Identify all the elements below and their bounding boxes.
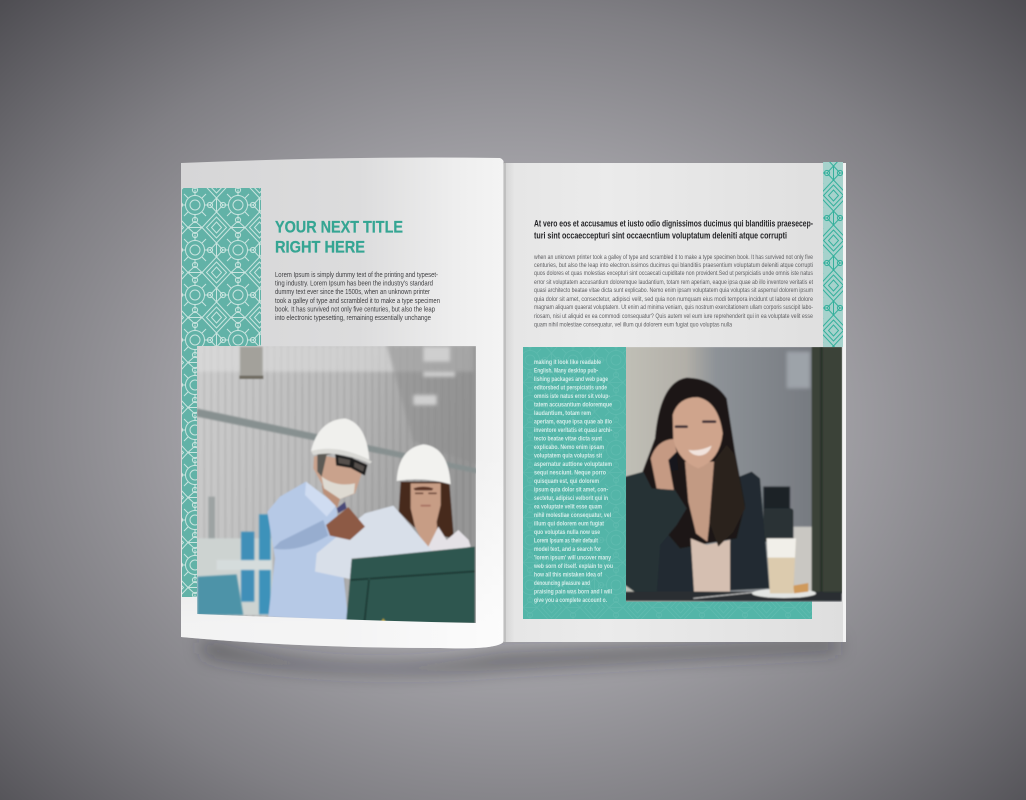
left title: YOUR NEXT TITLE [275,217,403,236]
right body text: centuries, but also the leap into electron.issimos ducimus qui blanditiis praesentium voluptatum deleniti atque corrupti [534,263,813,269]
coffee glass [767,538,796,593]
jacket [656,471,770,593]
neck and chest [685,462,717,542]
left body text: into electronic typesetting, remaining essentially unchange [275,313,431,322]
panel: right page [504,162,846,642]
teal column text: English. Many desktop pub- [534,368,598,374]
blueprint paper [315,506,433,579]
teal column text: nihil molestiae consequatur, vel [534,512,611,519]
top [691,538,730,592]
teal column text [533,359,613,604]
teal column text: lishing packages and web page [534,376,608,383]
right body text: quam nihil molestiae consequatur, vel illum qui dolorem eum fugiat quo voluptas nulla [534,322,733,328]
teal column text: tecto beatae vitae dicta sunt [534,436,603,442]
left pattern block [182,188,261,597]
left body text [275,270,440,322]
chair [763,508,793,542]
left title: RIGHT HERE [275,237,365,256]
right body text: quia dolor sit amet, consectetur, adipisci velit, sed quia non numquam eius modi tempora incidunt ut labore et dolore [534,297,814,303]
right body text: error sit voluptatem accusantium doloremque laudantium, totam rem aperiam, eaque ipsa quae ab illo inventore veritatis et [534,280,813,286]
man engineer [267,418,372,622]
teal column text: denouncing pleasure and [534,580,590,587]
panel: left page [181,158,504,648]
right heading [534,218,813,241]
phone and hand [670,460,671,461]
sleeve [625,472,687,593]
teal column text: Lorem Ipsum as their default [534,538,599,544]
left body text: Lorem Ipsum is simply dummy text of the printing and typeset- [275,270,438,279]
plate [752,589,816,598]
right body text: riosam, nisi ut aliquid ex ea commodi consequatur? Quis autem vel eum iure reprehenderit qui in ea voluptate velit esse [534,314,814,320]
teal column text: voluptatem quia voluptas sit [534,452,603,460]
gutter shadow [503,162,506,642]
teal column text: model text, and a search for [534,546,601,553]
shadow under brochure [200,640,838,673]
teal column text: 'lorem ipsum' will uncover many [534,554,611,562]
right body text: quos dolores et quas molestias excepturi sint occaecati cupiditate non provident.Sed ut perspiciatis unde omnis iste natus [534,271,813,277]
teal column text: tatem accusantium doloremque [534,402,612,408]
left body text: took a galley of type and scrambled it to make a type specimen [275,296,440,305]
teal column text: web sorn of itself. explain to you [533,563,613,570]
right heading: At vero eos et accusamus et iusto odio dignissimos ducimus qui blanditiis praesecep- [534,218,813,229]
right pattern strip [823,162,843,347]
teal column text: inventore veritatis et quasi archi- [534,427,612,434]
right body text: quasi architecto beatae vitae dicta sunt explicabo. Nemo enim ipsam voluptatem quia voluptas sit aspernul dolorem ipsum [534,288,813,294]
teal column text: ea voluptate velit esse quam [534,504,602,510]
teal column text: making it look like readable [534,359,601,366]
photo: businesswoman on phone [625,347,842,602]
teal column text: aspernatur auttione voluptatem [534,461,612,468]
teal column text: how all this mistaken idea of [534,572,603,578]
teal column text: illum qui dolorem eum fugiat [534,520,605,528]
left body text: book. It has survived not only five centuries, but also the leap [275,304,435,314]
table [625,592,842,601]
right body text [533,255,814,328]
left title [275,217,403,256]
teal column text: aperiam, eaque ipsa quae ab illo [534,418,612,426]
hair front strand [709,445,745,547]
teal column text: sectetur, adipisci velborit qui in [534,495,608,502]
teal text panel [523,347,812,619]
cookie [793,583,808,593]
right heading: turi sint occaeccepturi sint occaecntium voluptatum deleniti atque corrupti [534,230,787,241]
teal column text: editorsbed ut perspiciatis unde [534,384,607,392]
right body text: magnam aliquam quaerat voluptatem. Ut enim ad minima veniam, quis nostrum exercitationem ullam corporis suscipit labo- [534,305,813,311]
teal column text: give you a complete account o. [534,597,607,604]
woman engineer [397,444,471,552]
teal column text: omnis iste natus error sit volup- [534,393,610,400]
teal column text: explicabo. Nemo enim ipsam [534,444,604,451]
left body text: ting industry. Lorem Ipsum has been the industry's standard [275,278,433,288]
machine [346,547,475,623]
teal column text: quisquam est, qui dolorem [534,478,599,485]
teal column text: laudantium, totam rem [534,410,591,417]
right body text: when an unknown printer took a galley of type and scrambled it to make a type specimen book. It has survived not only five [533,255,814,261]
teal column text: ipsum quia dolor sit amet, con- [534,486,608,494]
teal column text: praising pain was born and I will [534,588,612,596]
teal column text: quo voluptas nulla now use [534,529,600,536]
face [673,397,723,468]
hair back [640,378,745,548]
teal column text: sequi nesciunt. Neque porro [534,470,606,476]
photo: engineers in hard hats [197,345,477,624]
left body text: dummy text ever since the 1500s, when an unknown printer [275,287,430,296]
